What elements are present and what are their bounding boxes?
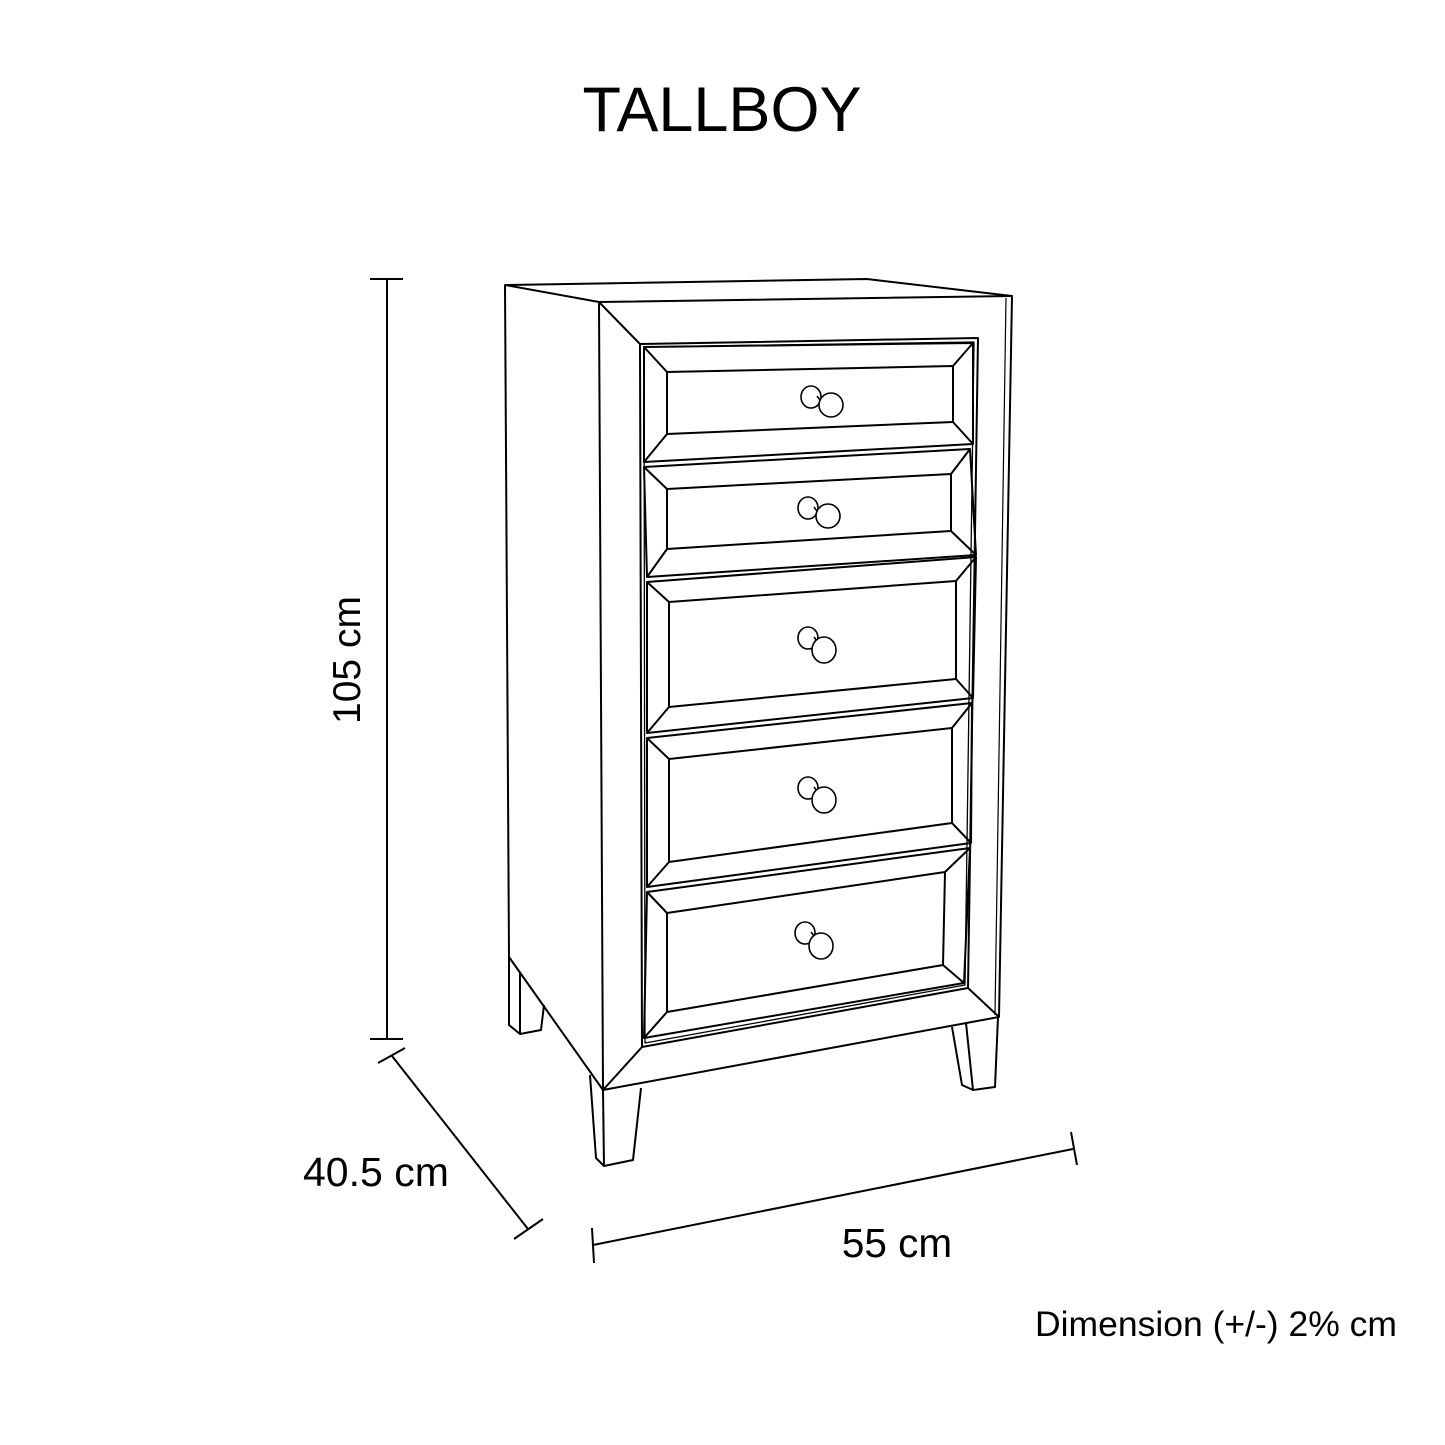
tallboy drawing	[505, 279, 1012, 1166]
drawer 5	[644, 848, 970, 1038]
label: height: 105 cm	[326, 596, 369, 724]
drawer 2	[644, 449, 976, 577]
dimension: width	[592, 1132, 1077, 1263]
label: width: 55 cm	[842, 1220, 952, 1266]
top face	[505, 279, 1012, 302]
dimension: depth	[378, 1048, 543, 1239]
note: tolerance: Dimension (+/-) 2% cm	[1035, 1304, 1397, 1344]
front frame	[599, 298, 1006, 1090]
side panel	[505, 285, 603, 1090]
drawer 3	[647, 557, 976, 733]
drawer 1	[644, 343, 973, 462]
title: TALLBOY	[583, 75, 861, 145]
legs	[509, 957, 998, 1166]
dimension: height	[370, 279, 403, 1039]
label: depth: 40.5 cm	[303, 1149, 449, 1195]
knobs	[795, 386, 843, 959]
front face	[599, 296, 1012, 1090]
drawer 4	[647, 703, 972, 887]
